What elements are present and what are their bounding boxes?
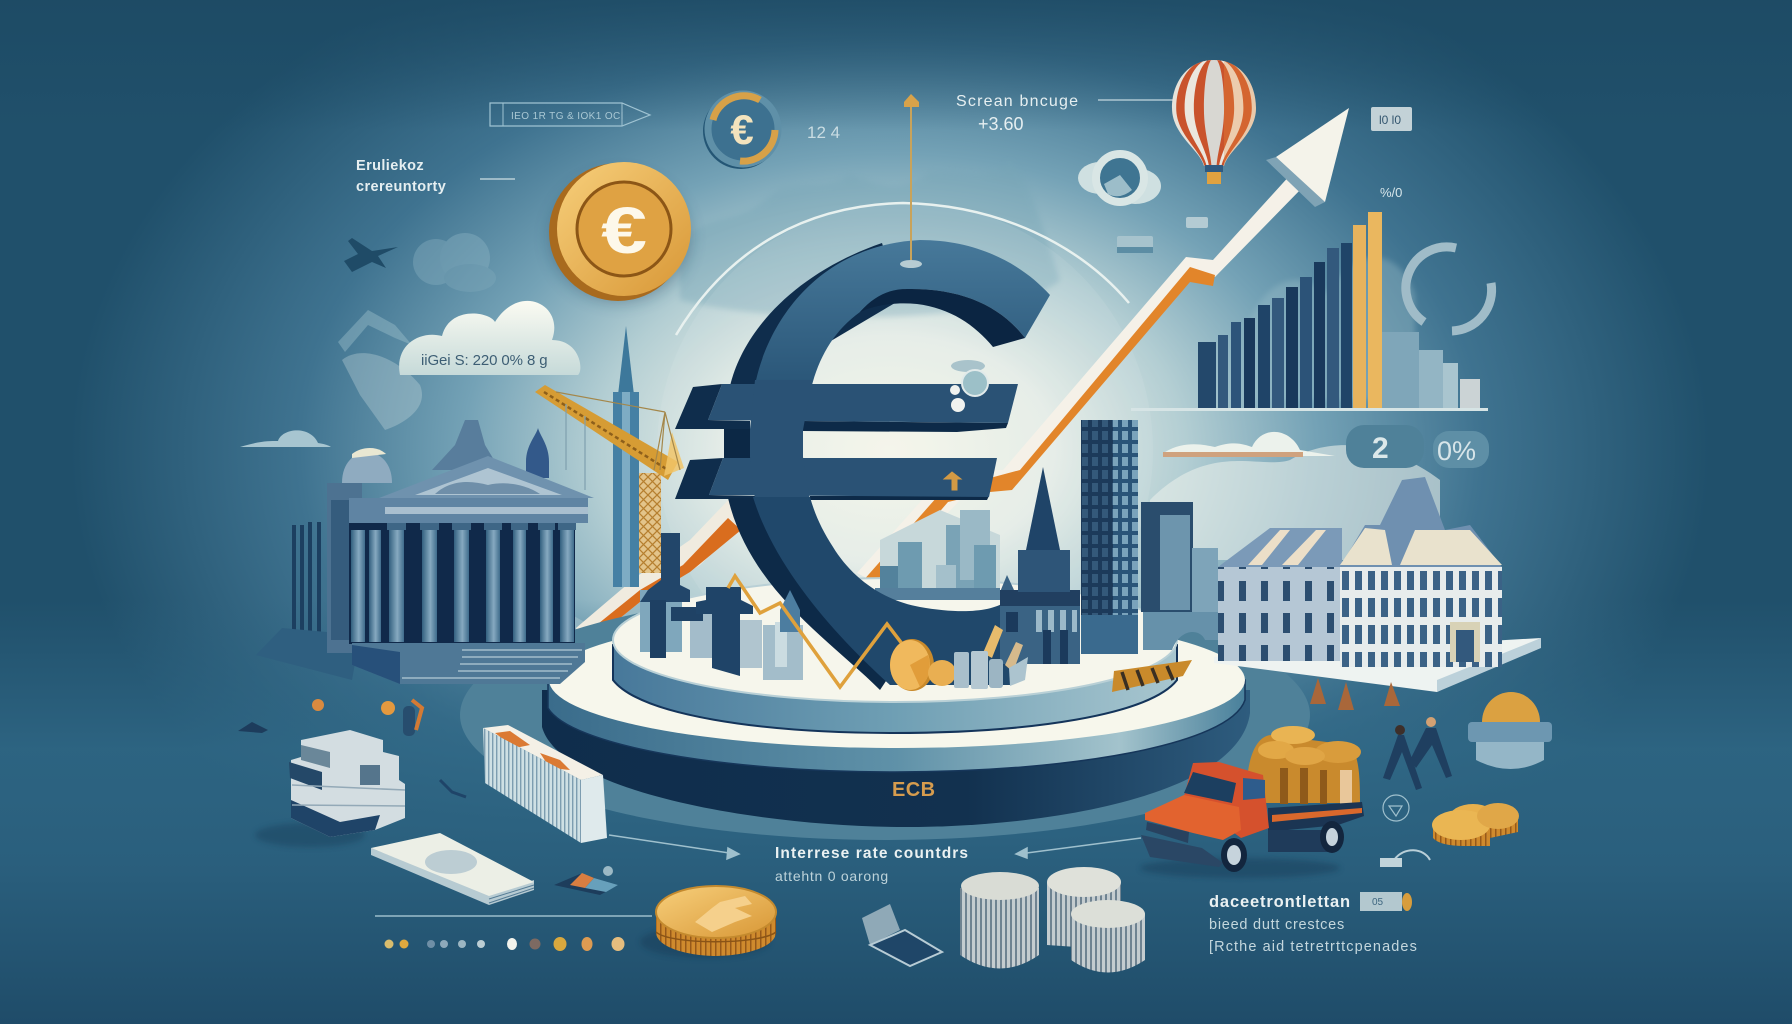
bank left pillars [292, 522, 321, 632]
tier 1 side [613, 645, 1177, 733]
small tag icon top right [1371, 107, 1412, 131]
cloud with data label: iiGei S: 220 0% 8 g [421, 352, 548, 369]
tall paper stack [483, 725, 607, 843]
vertical stem [750, 380, 812, 500]
bottom right text block: bieed dutt crestces [1209, 917, 1345, 933]
bank pediment [379, 456, 594, 498]
bar background buildings [1382, 332, 1480, 410]
icon: ring euro coin [703, 93, 779, 169]
cloud with data label [399, 301, 580, 375]
bank capitals [387, 523, 576, 530]
bank right dome [526, 428, 549, 478]
gold hazard bars on platform [1112, 660, 1192, 692]
dark base tier [542, 690, 1250, 827]
silver stack back [1047, 867, 1121, 950]
city skyline inside euro [875, 510, 1000, 600]
top bar [708, 384, 1018, 423]
bank columns [351, 530, 574, 642]
stat badges: 0% [1437, 436, 1476, 466]
truck grille [1146, 822, 1189, 843]
growth arrow [576, 108, 1349, 648]
traffic cones [1310, 678, 1400, 710]
icon: pin marker [900, 94, 922, 268]
thin cloud strip [1163, 432, 1335, 457]
small tag icon top right: l0 l0 [1379, 113, 1401, 127]
arrowhead [1266, 157, 1325, 207]
left label: Eruliekoz crereuntorty [356, 158, 515, 195]
truck front wheel [1221, 838, 1247, 872]
dark extrusion upper left [730, 243, 900, 386]
small return arrow icon [1380, 850, 1430, 867]
tier 2 top [549, 612, 1245, 748]
label: screan bncuge: Screan bncuge [956, 93, 1079, 110]
small cloud left [240, 430, 331, 447]
bank dark interior [349, 522, 575, 644]
dark bars [1198, 243, 1352, 410]
faded clouds left [338, 233, 496, 430]
lower bar [709, 458, 997, 497]
bank base steps left [256, 628, 360, 680]
broken ring gauge [1406, 247, 1492, 331]
arrow to interest label [609, 835, 739, 859]
construction crane [535, 385, 684, 573]
small percent label: %/0 [1380, 185, 1402, 200]
silver cylinders and gold bars [954, 625, 1028, 689]
left city block on platform [640, 533, 803, 680]
construction people [1383, 717, 1452, 790]
lower arc face [753, 497, 1012, 685]
label: screan bncuge: +3.60 [978, 114, 1024, 134]
bottom right text block: 05 [1372, 897, 1384, 908]
building left wing [1218, 567, 1340, 661]
top-left label: blueprint banner: IEO 1R TG & IOK1 OCI [511, 111, 624, 122]
sky haze: hills and clouds behind the euro [500, 160, 1440, 698]
gold coin pile on truck [1247, 726, 1361, 804]
interest rate text: Interrese rate countdrs [775, 845, 969, 862]
bottom right text block: [Rcthe aid tetretrttcpenades [1209, 939, 1418, 955]
european mansion building [1214, 477, 1541, 692]
gold coin and pieces on platform [890, 639, 956, 691]
silver stack front [1071, 900, 1145, 972]
lower bar extrusion [675, 458, 755, 499]
building plate [1214, 638, 1541, 692]
big gold euro coin [549, 162, 691, 302]
bank left dome [342, 452, 392, 483]
bank wing [327, 483, 362, 653]
left label: Eruliekoz crereuntorty: crereuntorty [356, 179, 446, 195]
top-left label: blueprint banner [490, 103, 650, 126]
glass tower [1081, 420, 1138, 654]
building entrance [1450, 622, 1480, 662]
shadow under truck [1140, 858, 1340, 878]
compass icon [1383, 795, 1409, 821]
arrow from truck to label [1016, 838, 1141, 858]
building right wing [1340, 567, 1502, 667]
stacked block [255, 730, 405, 847]
silver coin stacks [960, 867, 1145, 972]
gold zigzag line [728, 576, 903, 687]
icon: cloud ring [1078, 154, 1161, 204]
icon: hot air balloon [1172, 58, 1258, 184]
small up arrow on bar [944, 472, 961, 490]
truck bed [1268, 802, 1364, 832]
bank steps [352, 643, 585, 684]
bank entablature [349, 498, 588, 523]
bottom right text block [1209, 892, 1418, 955]
gothic building [1000, 467, 1080, 664]
top bar extrusion [675, 384, 750, 429]
small worker figures left [238, 699, 466, 797]
gold bars [1353, 212, 1382, 410]
tray icon [862, 904, 942, 966]
upper arc face [755, 240, 1050, 385]
tier 2 side [548, 680, 1245, 772]
right roof [1340, 477, 1502, 567]
tier 1 top [613, 578, 1177, 702]
row of small dots [384, 937, 624, 951]
arrow long rising band [857, 173, 1302, 585]
left roof [1218, 528, 1342, 567]
stat badges: 2 [1372, 432, 1389, 465]
inner dark edge of arc [860, 289, 1025, 347]
truck windscreen [1184, 772, 1236, 803]
compass detail on bar [950, 360, 988, 412]
small card icon [554, 866, 618, 895]
label: screan bncuge [956, 93, 1200, 134]
small gold coins right [1432, 803, 1519, 846]
arrow lower-left segment [576, 493, 757, 648]
small number 124: 12 4 [807, 123, 840, 142]
large arc line [676, 203, 1129, 335]
stat badges [1346, 425, 1489, 468]
icon: ring euro coin: € [730, 106, 754, 153]
truck bumper [1141, 835, 1223, 867]
gold coin stack bottom [640, 886, 776, 958]
central tower with spire [613, 326, 639, 587]
lower dark extrusion [728, 498, 900, 690]
interest rate text [775, 845, 969, 884]
neoclassical bank building [256, 420, 594, 684]
middle dark link [724, 429, 751, 458]
truck hood [1145, 795, 1241, 840]
ECB tiered platform [542, 578, 1250, 827]
big gold euro coin: € [601, 193, 647, 267]
interest rate text: attehtn 0 oarong [775, 868, 889, 884]
truck cab [1184, 762, 1269, 838]
big euro symbol [675, 240, 1050, 690]
silver stack left [960, 872, 1039, 968]
small floating box icons [1117, 217, 1208, 253]
stack of banknotes [371, 833, 534, 905]
bank centre dome [432, 420, 500, 470]
dark base tier: ECB [892, 779, 935, 801]
gold dome on blue cup [1468, 692, 1552, 769]
bar chart [1131, 212, 1488, 411]
divider line with gold coin [375, 915, 652, 917]
background buildings right [1141, 502, 1220, 650]
floor disc around platform [460, 590, 1310, 840]
truck side window [1243, 778, 1265, 800]
icon: airplane [344, 238, 398, 272]
truck rear wheel [1320, 821, 1344, 853]
orange truck [1141, 762, 1364, 872]
left label: Eruliekoz crereuntorty: Eruliekoz [356, 158, 424, 174]
bottom right text block: daceetrontlettan [1209, 893, 1351, 911]
